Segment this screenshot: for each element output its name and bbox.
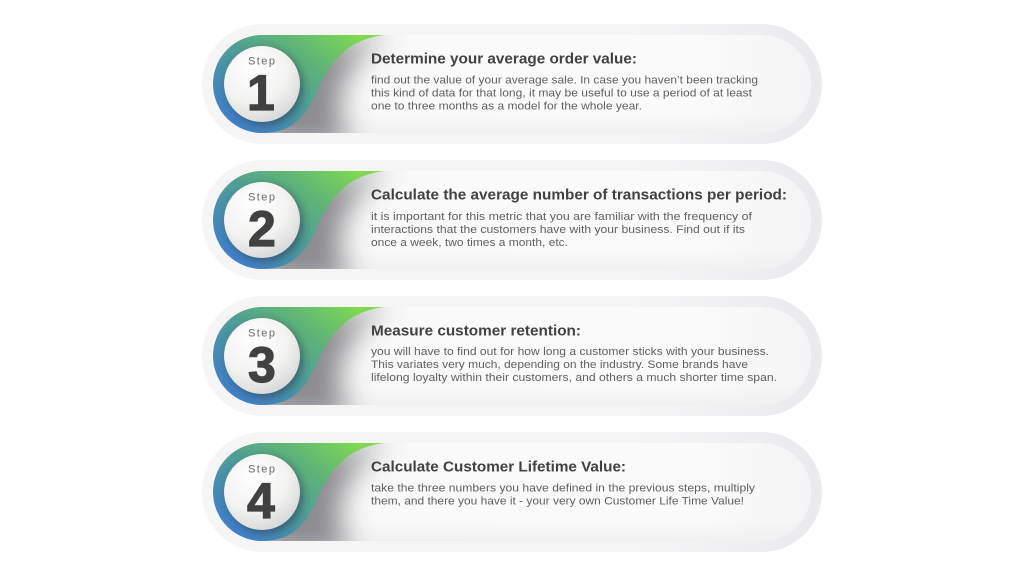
heading: Calculate Customer Lifetime Value: bbox=[371, 460, 626, 476]
step badge: Step bbox=[248, 328, 276, 340]
curl shadow bbox=[264, 171, 390, 269]
inner pill bbox=[213, 35, 811, 133]
step badge: 4 bbox=[247, 473, 275, 529]
body text: one to three months as a model for the whole year. bbox=[371, 100, 642, 112]
inner pill bbox=[213, 443, 811, 541]
body text: this kind of data for that long, it may be useful to use a period of at least bbox=[371, 87, 752, 99]
curl shadow bbox=[265, 443, 390, 541]
step badge bbox=[224, 318, 304, 398]
outer pill bbox=[202, 296, 822, 416]
gradient swoosh bbox=[213, 443, 385, 541]
step badge bbox=[224, 454, 304, 534]
body text bbox=[371, 346, 777, 384]
outer pill bbox=[202, 24, 822, 144]
inner pill bbox=[213, 307, 811, 405]
outer pill bbox=[202, 160, 822, 280]
heading: Determine your average order value: bbox=[371, 52, 637, 68]
body text bbox=[371, 74, 758, 112]
step badge: Step bbox=[248, 56, 276, 68]
body text: find out the value of your average sale. In case you haven’t been tracking bbox=[371, 74, 758, 86]
body text bbox=[371, 482, 756, 507]
step badge: 3 bbox=[248, 337, 276, 393]
panel: step 1 bbox=[202, 24, 822, 145]
gradient swoosh bbox=[213, 307, 385, 405]
step badge bbox=[224, 182, 304, 262]
gradient swoosh bbox=[213, 171, 385, 269]
outer pill bbox=[202, 432, 822, 552]
body text bbox=[371, 211, 753, 249]
panel: step 4 bbox=[202, 432, 822, 553]
body text: once a week, two times a month, etc. bbox=[371, 237, 568, 249]
panel: step 3 bbox=[202, 296, 822, 417]
panel: step 2 bbox=[202, 160, 822, 281]
body text: This variates very much, depending on the industry. Some brands have bbox=[371, 359, 748, 371]
body text: take the three numbers you have defined in the previous steps, multiply bbox=[371, 482, 756, 494]
heading: Calculate the average number of transactions per period: bbox=[371, 188, 787, 204]
step badge: Step bbox=[248, 464, 276, 476]
body text: you will have to find out for how long a customer sticks with your business. bbox=[371, 346, 769, 358]
body text: them, and there you have it - your very own Customer Life Time Value! bbox=[371, 495, 744, 507]
step badge bbox=[224, 46, 304, 126]
gradient swoosh bbox=[213, 35, 385, 133]
heading: Measure customer retention: bbox=[371, 324, 581, 340]
body text: lifelong loyalty within their customers, and others a much shorter time span. bbox=[371, 372, 777, 384]
body text: interactions that the customers have with your business. Find out if its bbox=[371, 224, 746, 236]
body text: it is important for this metric that you are familiar with the frequency of bbox=[371, 211, 753, 223]
inner pill bbox=[213, 171, 811, 269]
curl shadow bbox=[264, 35, 390, 133]
curl shadow bbox=[265, 307, 390, 405]
step badge: 1 bbox=[247, 65, 275, 121]
step badge: 2 bbox=[248, 201, 276, 257]
step badge: Step bbox=[248, 192, 276, 204]
